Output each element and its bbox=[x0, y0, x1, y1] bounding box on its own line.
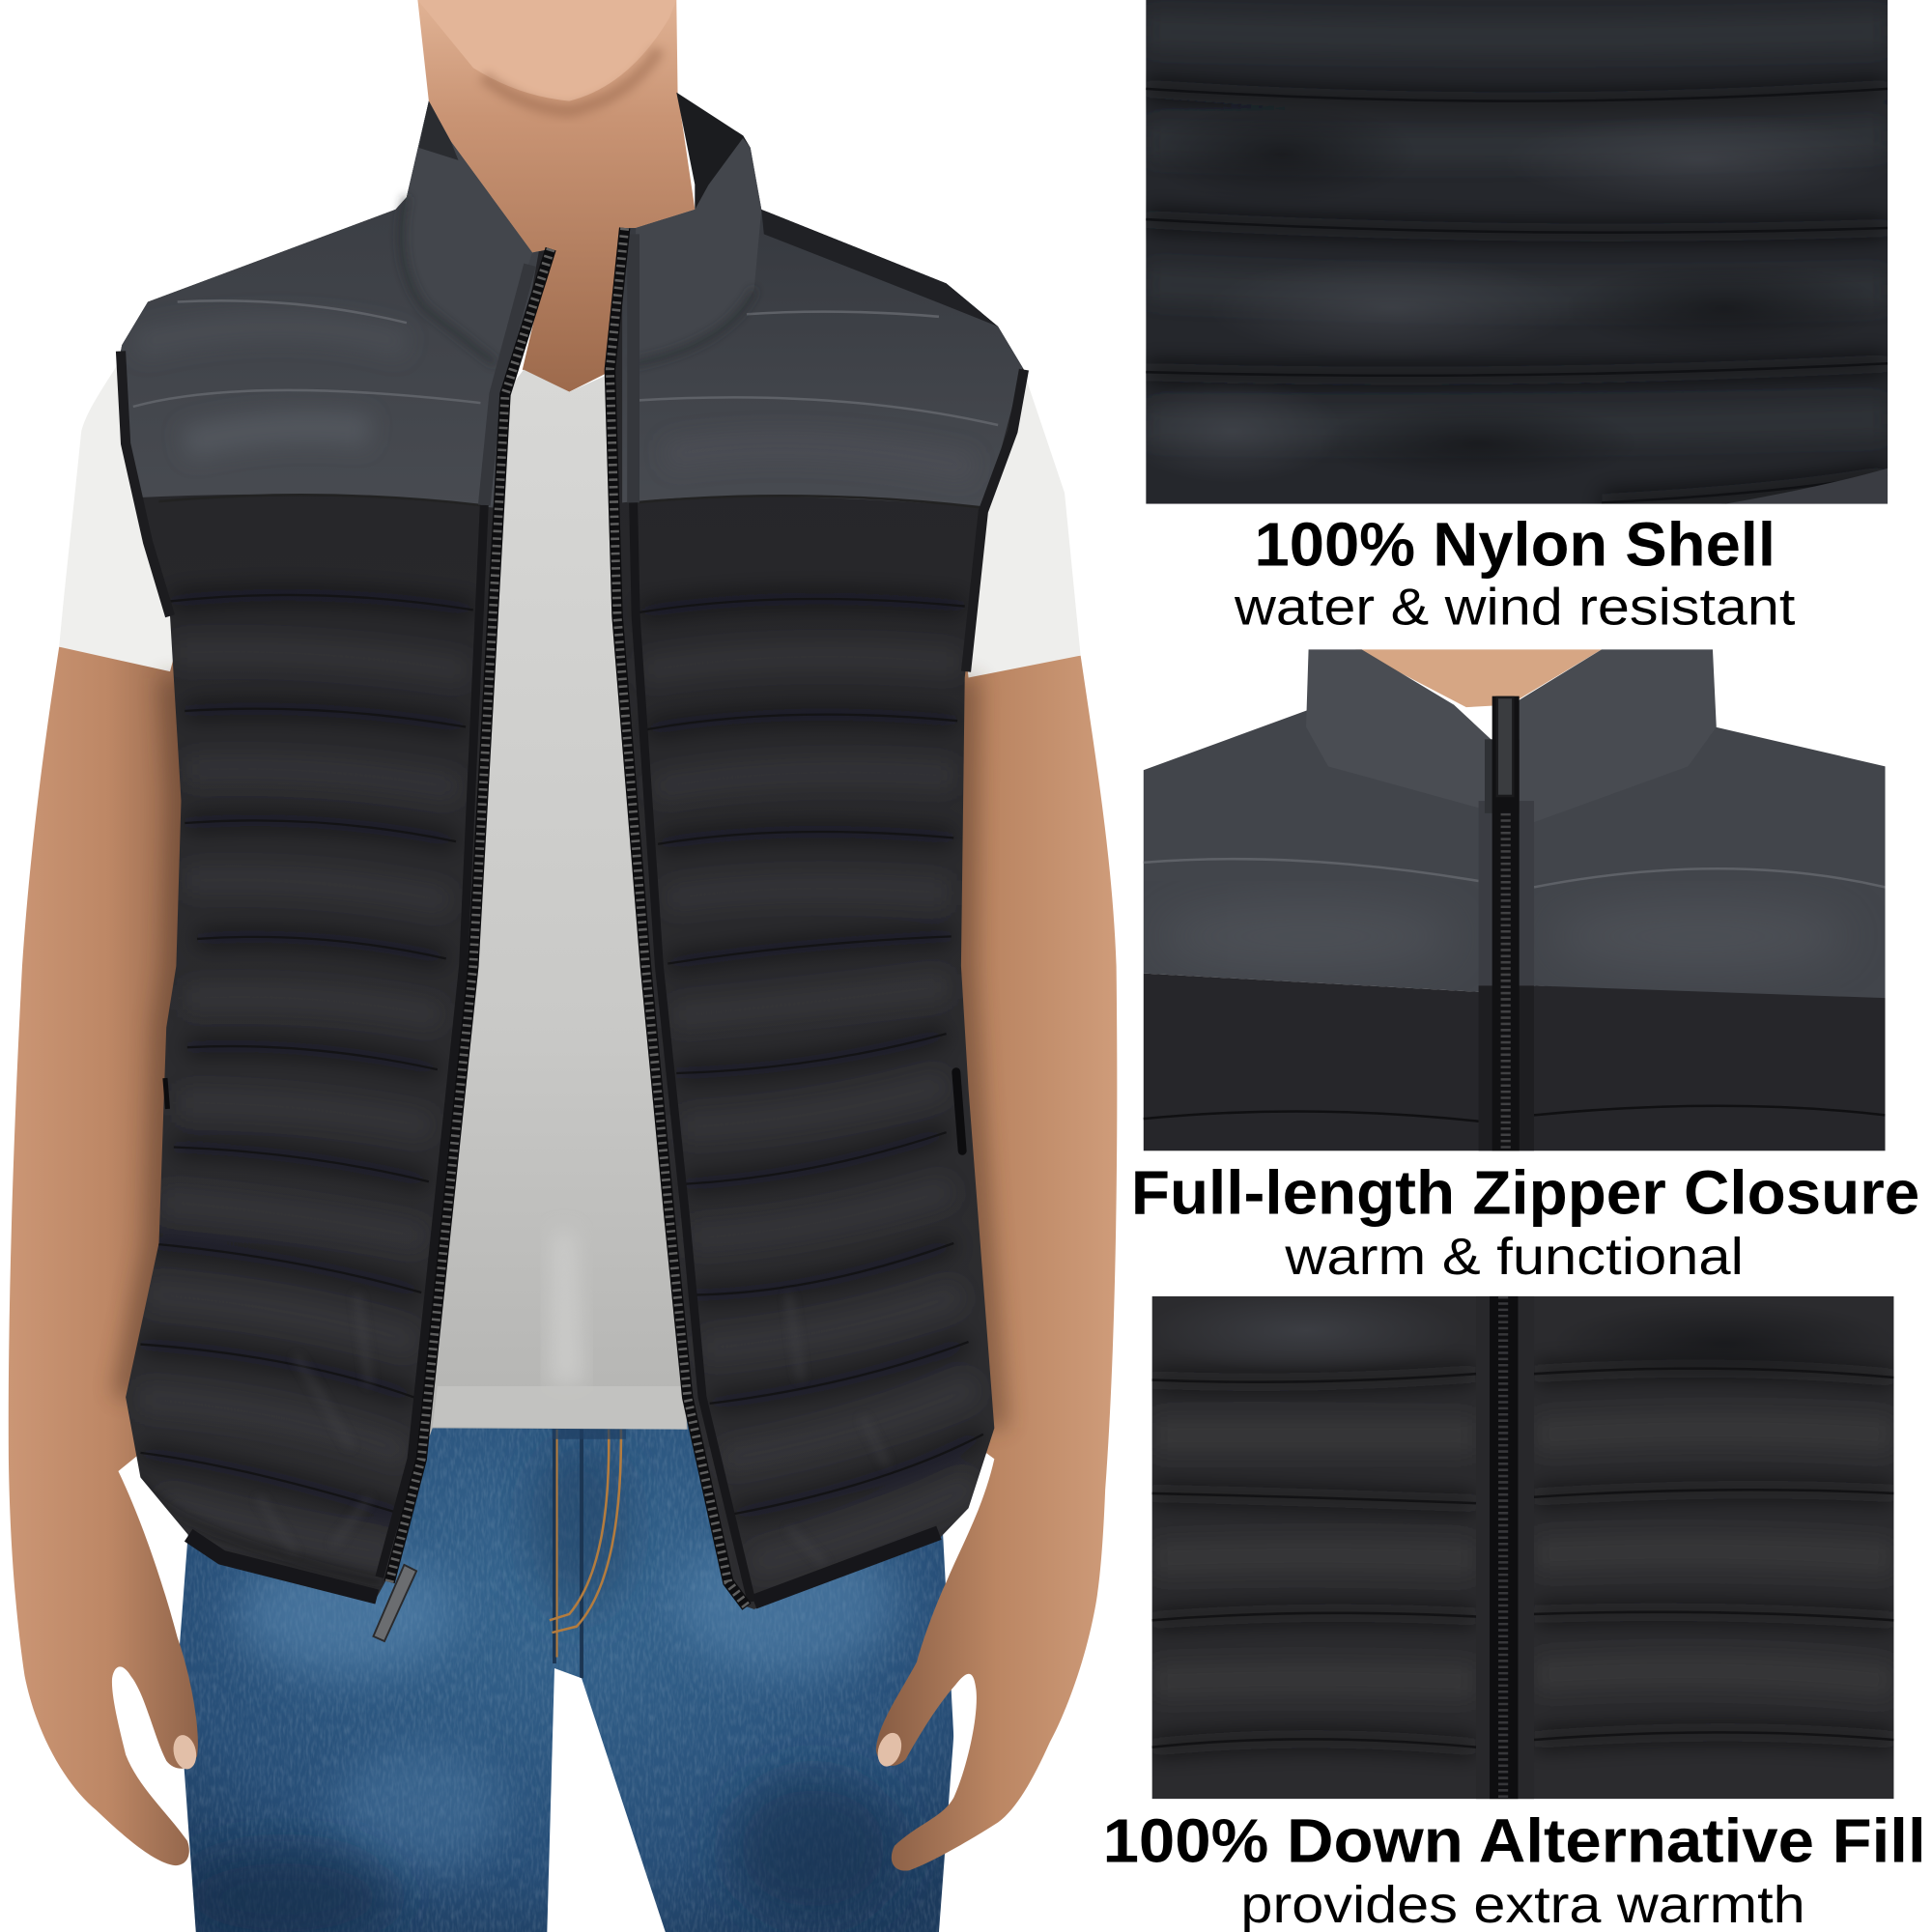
black body bbox=[1144, 974, 1886, 1151]
panel: zipper collar close-up bbox=[1144, 649, 1886, 1151]
right collar back lining bbox=[676, 93, 751, 210]
fabric sheen bbox=[1208, 1305, 1812, 1360]
zipper placket bbox=[1476, 1296, 1534, 1799]
t-shirt fold bbox=[549, 1233, 585, 1386]
right pocket zipper bbox=[956, 1072, 962, 1151]
caption: zipper closure bbox=[1131, 1157, 1919, 1286]
neck bbox=[1355, 649, 1602, 707]
right collar bbox=[1519, 649, 1717, 764]
yoke bbox=[1144, 708, 1886, 1005]
heading: 100% Nylon Shell bbox=[1254, 509, 1776, 579]
left arm and hand bbox=[9, 647, 210, 1865]
fabric sheen bbox=[1171, 126, 1822, 464]
right hem rib bbox=[754, 1533, 939, 1602]
right zipper bbox=[610, 228, 752, 1606]
heading: 100% Down Alternative Fill bbox=[1103, 1805, 1926, 1875]
t-shirt hem bbox=[433, 1386, 686, 1430]
left zipper bbox=[380, 249, 551, 1582]
zipper teeth bbox=[1490, 1296, 1518, 1799]
arm shadow under vest edge bbox=[126, 678, 994, 1428]
neck and chin bbox=[417, 0, 695, 392]
left collar bbox=[1306, 649, 1492, 764]
left hem rib bbox=[188, 1535, 377, 1597]
subheading: water & wind resistant bbox=[1234, 580, 1796, 637]
photo: man wearing puffer vest bbox=[9, 0, 1117, 1932]
zipper pull bbox=[373, 1565, 416, 1641]
left armhole binding bbox=[121, 352, 170, 616]
caption: down alternative fill bbox=[1103, 1805, 1926, 1932]
zipper pull bbox=[1497, 697, 1513, 796]
right arm and hand bbox=[873, 656, 1117, 1871]
left pocket bbox=[165, 1078, 167, 1109]
right armhole binding bbox=[966, 370, 1024, 671]
left collar bbox=[402, 101, 532, 363]
jeans bbox=[173, 1405, 961, 1932]
t-shirt body bbox=[421, 370, 688, 1459]
heading: Full-length Zipper Closure bbox=[1131, 1157, 1919, 1227]
panel: nylon shell close-up bbox=[1122, 0, 1897, 504]
left sleeve bbox=[59, 363, 185, 671]
vest right front bbox=[610, 93, 1035, 1609]
right sleeve bbox=[955, 372, 1081, 678]
vest left front bbox=[111, 74, 551, 1597]
caption: nylon shell bbox=[1234, 509, 1796, 637]
zipper bbox=[1479, 801, 1534, 992]
right collar bbox=[634, 138, 761, 363]
subheading: warm & functional bbox=[1284, 1229, 1744, 1286]
panel: down alternative fill close-up bbox=[1146, 1289, 1897, 1799]
